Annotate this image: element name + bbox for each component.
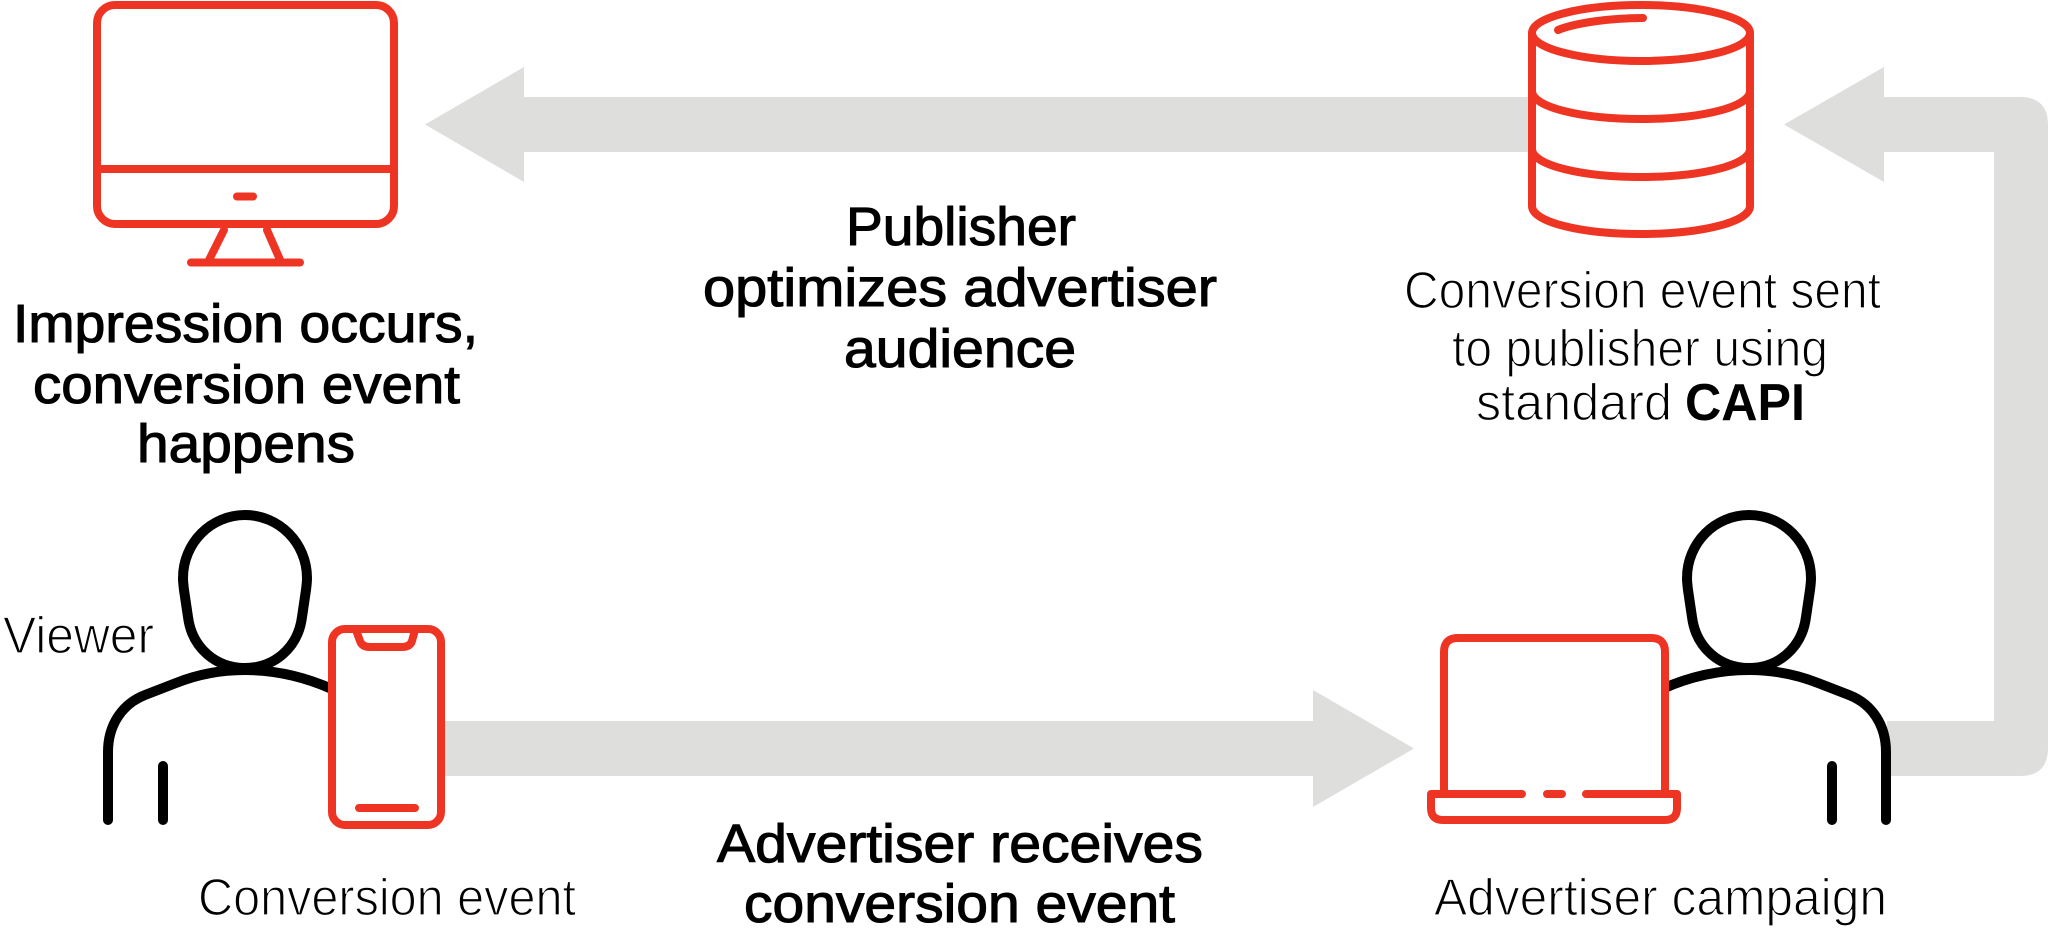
text: conversion event sent to publisher using standard CAPI xyxy=(1404,262,1881,432)
heading: impression occurs: conversion event xyxy=(33,355,460,415)
text: conversion event sent to publisher using standard CAPI: Conversion event sent xyxy=(1404,262,1881,320)
heading: publisher optimizes advertiser audience: Publisher xyxy=(846,197,1076,257)
label: viewer: Viewer xyxy=(3,607,154,665)
heading: publisher optimizes advertiser audience: optimizes advertiser xyxy=(703,258,1217,318)
heading: advertiser receives conversion event: Advertiser receives xyxy=(717,814,1203,874)
heading: impression occurs xyxy=(13,294,478,474)
heading: publisher optimizes advertiser audience xyxy=(703,197,1217,379)
icon: smartphone xyxy=(332,629,441,825)
heading: advertiser receives conversion event: conversion event xyxy=(744,874,1175,934)
icon: database xyxy=(1532,5,1750,234)
icon: advertiser person xyxy=(1662,515,1886,820)
icon: desktop monitor xyxy=(97,5,394,262)
label: advertiser campaign: Advertiser campaign xyxy=(1434,869,1887,927)
text: conversion event sent to publisher using standard CAPI: CAPI xyxy=(1685,374,1805,432)
arrow: phone to laptop xyxy=(445,690,1414,807)
icon: viewer person xyxy=(108,515,332,820)
heading: advertiser receives conversion event xyxy=(717,814,1203,934)
label: conversion event: Conversion event xyxy=(198,869,577,927)
arrow: publisher optimizes, database to monitor xyxy=(425,67,1530,182)
arrow: advertiser campaign up and round to database xyxy=(1784,67,2048,776)
text: conversion event sent to publisher using standard CAPI: to publisher using xyxy=(1452,320,1828,378)
heading: impression occurs: happens xyxy=(137,414,355,474)
heading: publisher optimizes advertiser audience: audience xyxy=(844,319,1076,379)
icon: laptop xyxy=(1431,638,1677,820)
heading: impression occurs: Impression occurs, xyxy=(13,294,478,354)
text: conversion event sent to publisher using standard CAPI: standard xyxy=(1476,374,1672,432)
